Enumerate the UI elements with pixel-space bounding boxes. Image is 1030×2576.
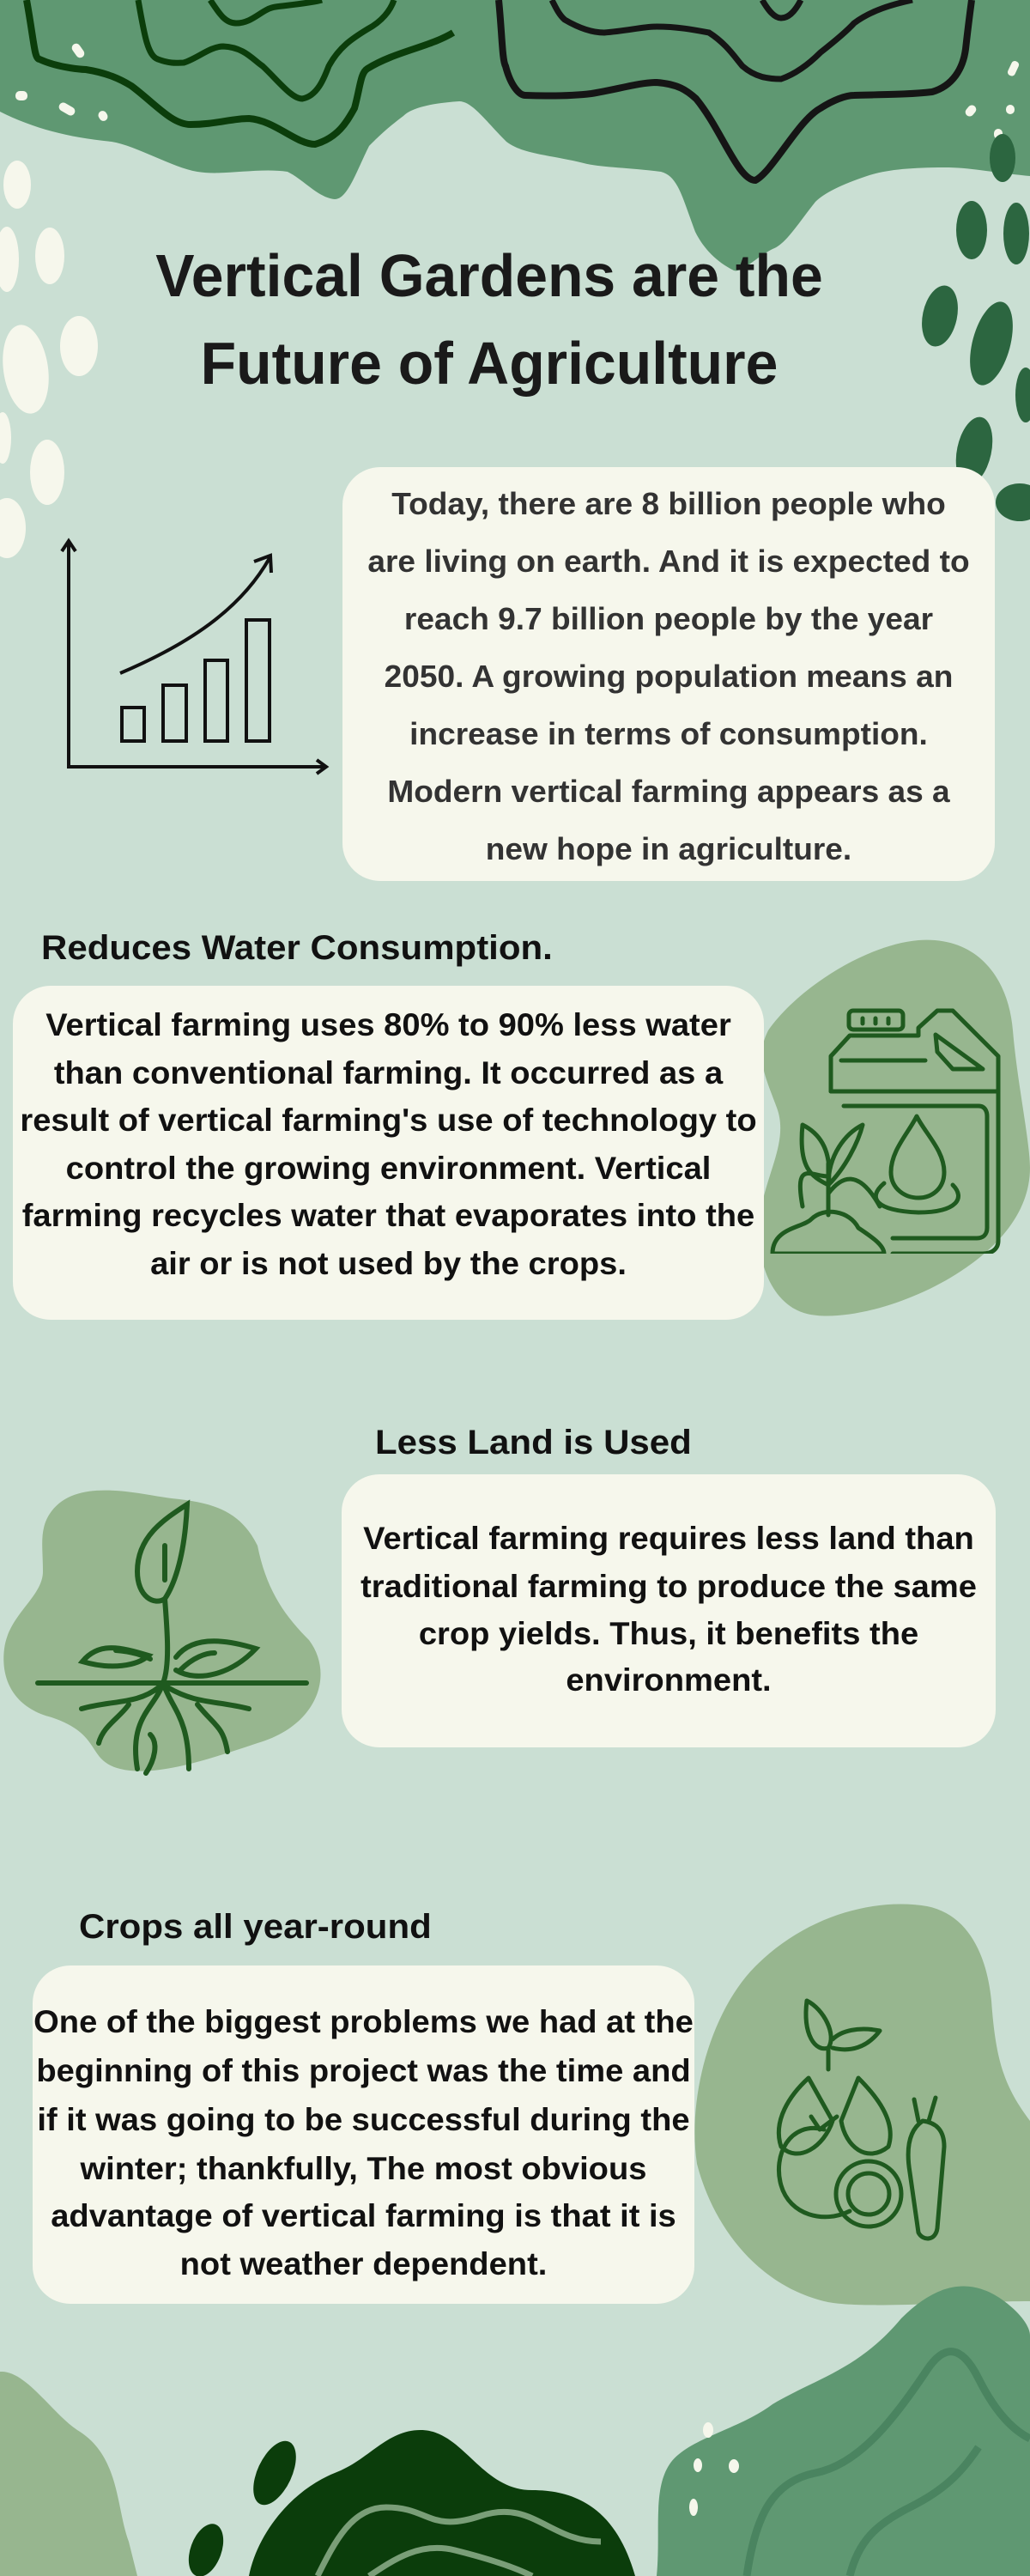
text box: crops: beginning of this project was the time and <box>36 2053 691 2088</box>
text box: water: result of vertical farming's use of technology to <box>20 1103 757 1138</box>
text box: water: than conventional farming. It occurred as a <box>54 1055 723 1091</box>
text box: land: crop yields. Thus, it benefits the <box>419 1616 918 1651</box>
text box: water: farming recycles water that evaporates into the <box>22 1198 754 1233</box>
title: Vertical Gardens are the <box>155 242 823 309</box>
text box: intro: are living on earth. And it is expected to <box>367 544 970 579</box>
heading: water: Reduces Water Consumption. <box>41 929 553 967</box>
text box: intro: 2050. A growing population means an <box>385 659 953 694</box>
blob land <box>3 1491 320 1771</box>
text box: water <box>13 986 764 1320</box>
text box: intro: reach 9.7 billion people by the year <box>404 601 933 636</box>
title <box>155 242 823 397</box>
text box: crops <box>33 1965 694 2304</box>
heading: land: Less Land is Used <box>375 1424 692 1461</box>
text box: crops: not weather dependent. <box>180 2246 547 2281</box>
heading: crops: Crops all year-round <box>79 1908 432 1946</box>
text box: water: Vertical farming uses 80% to 90% less water <box>45 1007 731 1042</box>
text box: intro <box>342 467 995 881</box>
text box: land: traditional farming to produce the same <box>360 1569 977 1604</box>
text box: intro: Modern vertical farming appears as a <box>387 774 950 809</box>
text box: land: environment. <box>566 1662 772 1698</box>
text box: crops: winter; thankfully, The most obvious <box>81 2151 646 2186</box>
blob crops <box>694 1905 1030 2305</box>
text box: land <box>342 1474 996 1747</box>
text box: crops: One of the biggest problems we had at the <box>33 2004 694 2039</box>
text box: intro: Today, there are 8 billion people who <box>391 486 946 521</box>
bottom blobs <box>0 2372 137 2576</box>
text box: water: air or is not used by the crops. <box>150 1246 627 1281</box>
blob water <box>759 940 1030 1316</box>
icon: plant with roots <box>35 1499 309 1776</box>
text box: intro: increase in terms of consumption. <box>409 716 928 751</box>
icon: fruits and vegetables <box>776 1999 946 2241</box>
title: Future of Agriculture <box>201 330 778 397</box>
icon: growth chart <box>60 538 330 775</box>
text box: water: control the growing environment. Vertical <box>66 1151 711 1186</box>
text box: crops: advantage of vertical farming is that it is <box>51 2198 676 2233</box>
text box: land: Vertical farming requires less land than <box>363 1521 974 1556</box>
text box: intro: new hope in agriculture. <box>486 831 851 866</box>
text box: crops: if it was going to be successful during the <box>37 2102 690 2137</box>
icon: water jerry can with plant <box>771 1008 1001 1254</box>
